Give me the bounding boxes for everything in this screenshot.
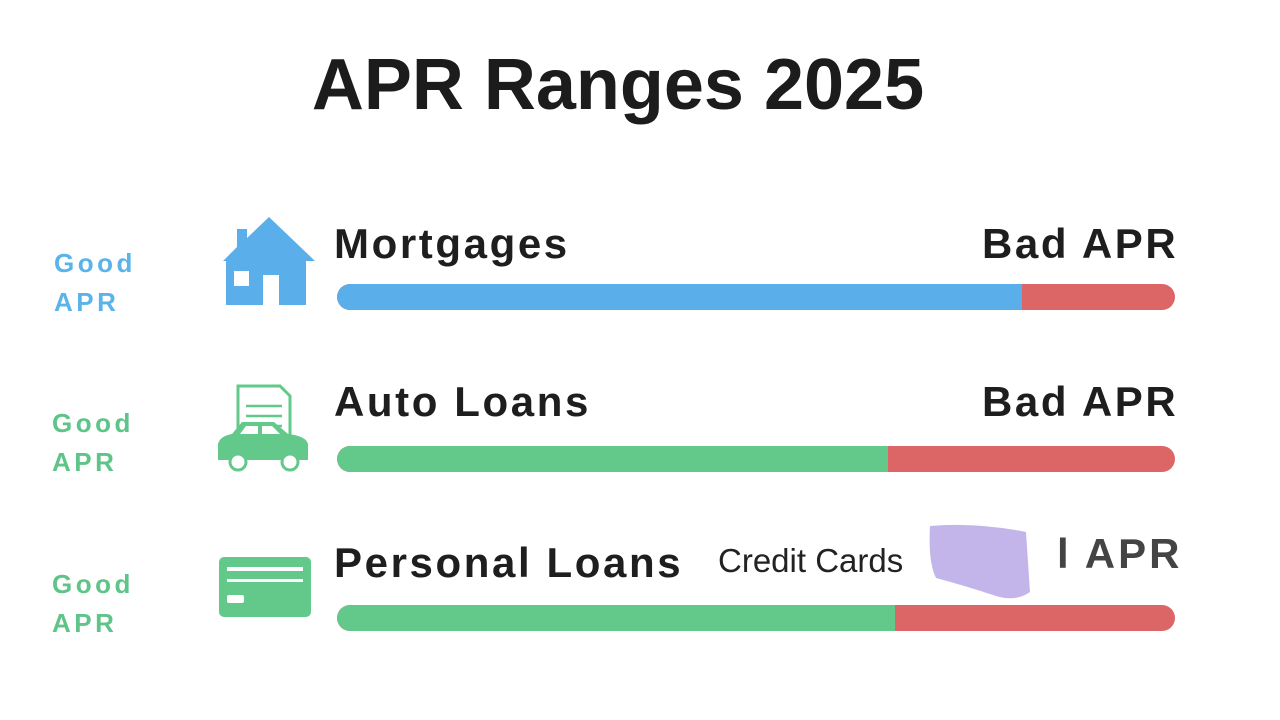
good apr label bbox=[52, 569, 134, 638]
bar bbox=[337, 284, 1175, 310]
good apr label: APR bbox=[52, 447, 117, 477]
good apr label: Good bbox=[52, 408, 134, 438]
title: APR Ranges 2025 bbox=[312, 45, 924, 125]
row: auto loans bbox=[52, 378, 1178, 477]
row: mortgages bbox=[54, 217, 1178, 317]
bad apr label: Bad APR bbox=[982, 220, 1178, 267]
label: Auto Loans bbox=[334, 378, 591, 425]
bad apr label: l APR bbox=[1057, 530, 1182, 577]
row: personal loans bbox=[52, 524, 1182, 638]
good apr label: APR bbox=[52, 608, 117, 638]
good apr label bbox=[52, 408, 134, 477]
bar bbox=[337, 446, 1175, 472]
bar bbox=[337, 605, 1175, 631]
good apr label: Good bbox=[54, 248, 136, 278]
icon: house bbox=[223, 217, 315, 305]
purple card blob bbox=[930, 524, 1030, 598]
icon: car and document bbox=[218, 384, 308, 472]
good apr label bbox=[54, 248, 136, 317]
label: Mortgages bbox=[334, 220, 570, 267]
label: Personal Loans bbox=[334, 539, 683, 586]
icon: credit card bbox=[219, 557, 311, 617]
good apr label: APR bbox=[54, 287, 119, 317]
bad apr label: Bad APR bbox=[982, 378, 1178, 425]
good apr label: Good bbox=[52, 569, 134, 599]
credit cards text: Credit Cards bbox=[718, 542, 903, 579]
